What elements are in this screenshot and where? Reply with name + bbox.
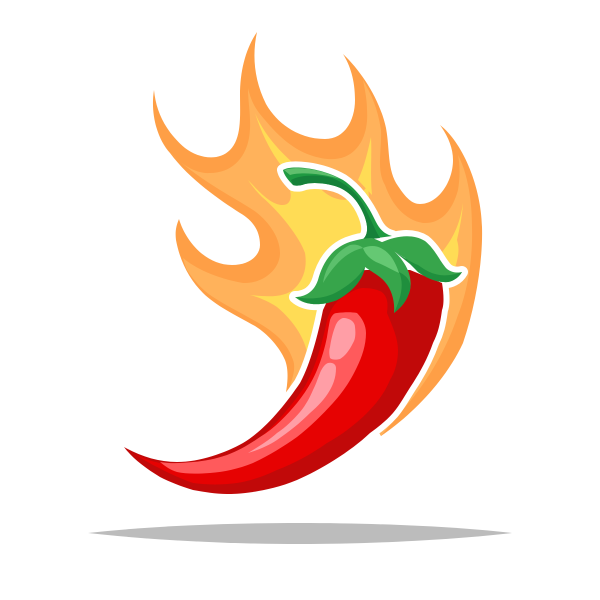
stem [283, 167, 392, 240]
leaf: right lobe [380, 236, 462, 282]
flame: upper middle yellow sliver [358, 137, 372, 195]
flames [153, 32, 482, 436]
flame: outer orange layer [153, 32, 482, 436]
leaf: right lobe shadow [395, 252, 462, 282]
body: upper gloss [329, 318, 355, 360]
flame: light orange layer [170, 80, 472, 436]
stem shade [291, 176, 380, 240]
pepper white outline [124, 167, 462, 494]
body: lower gloss [248, 363, 336, 453]
body: dark red base [124, 270, 444, 494]
leaf: lobe shadow [297, 267, 410, 313]
stem and leaves [283, 167, 462, 313]
body: highlight [160, 312, 366, 474]
pepper body [124, 270, 444, 494]
leaf: left and centre lobes [295, 238, 411, 313]
leaf: centre lobe highlight patch [363, 246, 399, 273]
flame: yellow core [248, 180, 400, 390]
body: main red [135, 288, 398, 484]
stem highlight [284, 168, 340, 179]
flame: right yellow sliver [442, 203, 463, 268]
ground shadow [88, 523, 512, 544]
leaf: left lobe highlight streak [323, 245, 363, 283]
flame: upper left yellow sliver [255, 113, 292, 170]
